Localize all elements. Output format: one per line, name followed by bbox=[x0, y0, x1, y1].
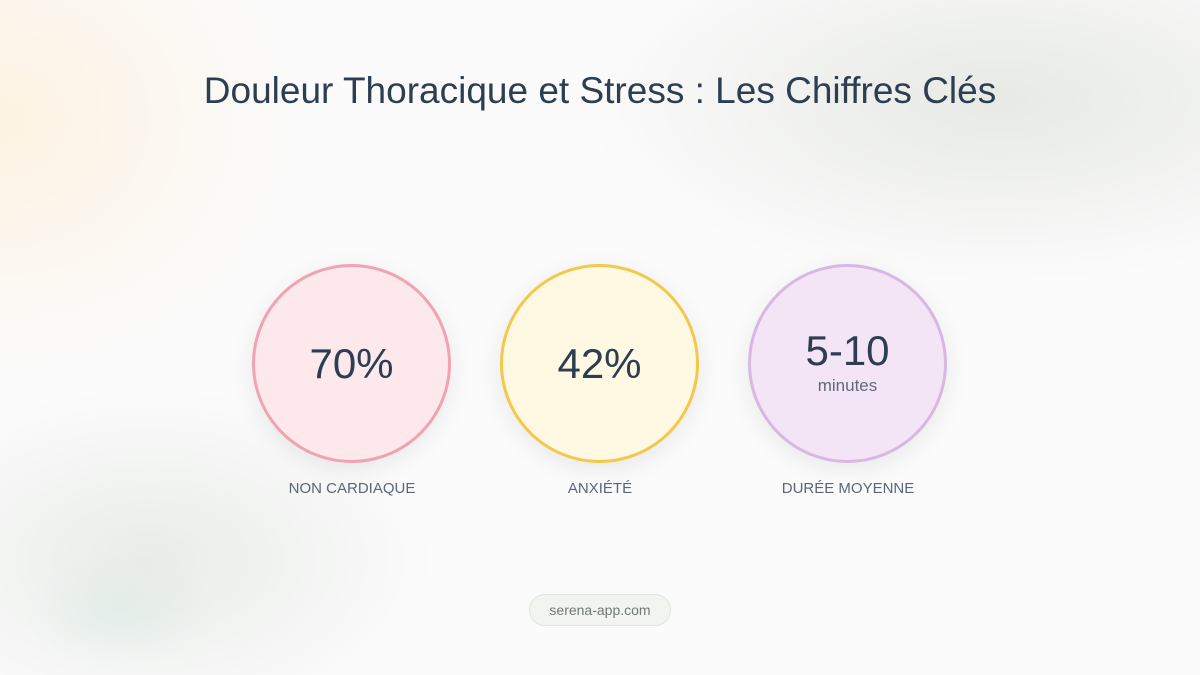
title: Douleur Thoracique et Stress : Les Chiffres Clés bbox=[204, 70, 996, 111]
footer pill: serena-app.com bbox=[549, 602, 651, 618]
stat circle: 42%: 42% bbox=[557, 340, 642, 386]
label: durée moyenne: DURÉE MOYENNE bbox=[782, 480, 914, 497]
footer pill bbox=[529, 594, 671, 626]
stat circle: 42% bbox=[500, 264, 699, 463]
stat circle: 5-10 minutes: minutes bbox=[818, 376, 877, 394]
stat circle: 5-10 minutes: 5-10 bbox=[805, 326, 890, 374]
stat circle: 70%: 70% bbox=[309, 340, 394, 386]
label: non cardiaque: NON CARDIAQUE bbox=[289, 480, 415, 497]
stat circle: 70% bbox=[252, 264, 451, 463]
label: anxiété: ANXIÉTÉ bbox=[568, 480, 632, 497]
stat circle: 5-10 minutes bbox=[748, 264, 947, 463]
